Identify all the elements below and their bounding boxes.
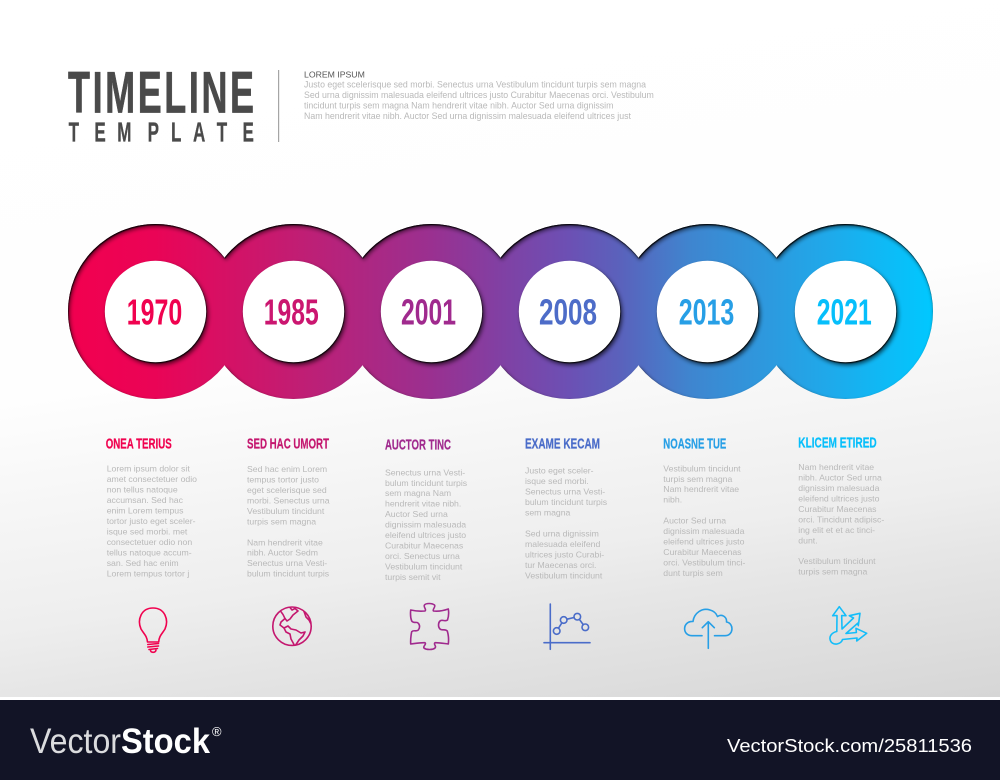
text block: Curabitur Maecenas xyxy=(385,541,464,551)
text block: Vestibulum tincidunt xyxy=(385,562,463,572)
text block: nibh. xyxy=(663,495,682,505)
header text block: LOREM IPSUM xyxy=(304,69,365,79)
title: TEMPLATE xyxy=(69,116,254,148)
text block: ultrices justo Curabi- xyxy=(525,549,604,559)
text block: Auctor Sed urna xyxy=(663,516,726,526)
year 1985 xyxy=(243,261,344,362)
icon: diverging arrows xyxy=(830,607,867,644)
header text block xyxy=(304,69,654,121)
image url: VectorStock.com/25811536 xyxy=(727,736,972,756)
text block: isque sed morbi. met xyxy=(107,526,188,536)
panel: exame kecam xyxy=(525,436,608,649)
text block: enim Lorem tempus xyxy=(107,506,184,516)
text block: morbi. Senectus urna xyxy=(247,495,330,505)
text block: Nam hendrerit vitae xyxy=(247,537,323,547)
year 2013: 2013 xyxy=(679,291,734,332)
icon: cloud upload xyxy=(685,609,732,648)
heading: SED HAC UMORT xyxy=(247,435,329,452)
text block: Curabitur Maecenas xyxy=(663,547,742,557)
text block xyxy=(385,467,468,582)
text block: tur Maecenas orci. xyxy=(525,560,596,570)
text block: non tellus natoque xyxy=(107,485,178,495)
text block: Vestibulum tincidunt xyxy=(247,506,325,516)
heading: EXAME KECAM xyxy=(525,436,600,453)
icon: puzzle piece xyxy=(411,604,449,650)
year 1970: 1970 xyxy=(127,291,182,332)
text block: Lorem tempus tortor j xyxy=(107,568,189,578)
text block: sem magna xyxy=(525,508,571,518)
text block: turpis sem magna xyxy=(663,474,733,484)
text block: Sed hac enim Lorem xyxy=(247,464,327,474)
header text block: Nam hendrerit vitae nibh. Auctor Sed urna dignissim malesuada eleifend ultrices just xyxy=(304,111,631,121)
logo: ® xyxy=(212,724,222,739)
heading: ONEA TERIUS xyxy=(106,435,172,452)
text block: tortor justo eget sceler- xyxy=(107,516,196,526)
logo: Stock xyxy=(121,722,210,761)
text block: nibh. Auctor Sedm xyxy=(247,548,318,558)
year 2001: 2001 xyxy=(401,291,456,332)
text block: accumsan. Sed hac xyxy=(107,495,184,505)
text block: orci. Senectus urna xyxy=(385,551,460,561)
text block: Vestibulum tincidunt xyxy=(798,556,876,566)
timeline ring band xyxy=(68,224,933,399)
heading: AUCTOR TINC xyxy=(385,436,451,453)
text block: bulum tincidunt turpis xyxy=(525,497,608,507)
header text block: tincidunt turpis sem magna Nam hendrerit vitae nibh. Auctor Sed urna dignissim xyxy=(304,101,613,111)
text block: turpis semit vit xyxy=(385,572,441,582)
icon: light bulb xyxy=(140,608,166,652)
text block: eleifend ultrices justo xyxy=(663,537,745,547)
text block: dignissim malesuada xyxy=(385,520,466,530)
text block xyxy=(525,466,608,580)
year 1970 xyxy=(105,261,206,362)
heading: KLICEM ETIRED xyxy=(798,434,877,451)
text block xyxy=(247,464,330,579)
text block: eleifend ultrices justo xyxy=(385,530,466,540)
year 2001 xyxy=(381,261,482,362)
text block: Senectus urna Vesti- xyxy=(247,558,327,568)
text block: Vestibulum tincidunt xyxy=(663,463,741,473)
text block: sem magna Nam xyxy=(385,488,451,498)
text block: Curabitur Maecenas xyxy=(798,504,877,514)
text block: isque sed morbi. xyxy=(525,476,589,486)
text block: orci. Tincidunt adipisc- xyxy=(798,514,884,524)
panel: auctor tinc xyxy=(385,436,468,650)
text block: nibh. Auctor Sed urna xyxy=(798,472,882,482)
panel: noasne tue xyxy=(663,435,745,648)
text block: san. Sed hac enim xyxy=(107,558,179,568)
text block xyxy=(663,463,745,578)
year 2008 xyxy=(519,261,620,362)
text block: dunt. xyxy=(798,535,818,545)
icon: line chart xyxy=(544,604,590,649)
text block: Nam hendrerit vitae xyxy=(663,484,739,494)
header text block: Sed urna dignissim malesuada eleifend ultrices justo Curabitur Maecenas orci. Vestibulum xyxy=(304,90,654,100)
year 2021: 2021 xyxy=(817,291,872,332)
text block: eleifend ultrices justo xyxy=(798,493,880,503)
text block: Vestibulum tincidunt xyxy=(525,570,603,580)
text block: ing elit et et ac tinci- xyxy=(798,525,875,535)
footer bar xyxy=(0,700,1000,780)
text block: Nam hendrerit vitae xyxy=(798,462,874,472)
text block: Sed urna dignissim xyxy=(525,528,599,538)
logo: Vector xyxy=(30,722,121,761)
text block: tempus tortor justo xyxy=(247,474,319,484)
white strip xyxy=(0,697,1000,700)
text block: Justo eget sceler- xyxy=(525,466,594,476)
text block: Senectus urna Vesti- xyxy=(525,487,605,497)
year 2013 xyxy=(657,261,758,362)
text block: Senectus urna Vesti- xyxy=(385,467,465,477)
text block: bulum tincidunt turpis xyxy=(385,478,468,488)
text block: dignissim malesuada xyxy=(798,483,880,493)
year 2008: 2008 xyxy=(539,291,597,332)
text block: malesuada eleifend xyxy=(525,539,601,549)
year 2021 xyxy=(795,261,896,362)
text block: orci. Vestibulum tinci- xyxy=(663,558,745,568)
text block: Auctor Sed urna xyxy=(385,509,448,519)
text block: dignissim malesuada xyxy=(663,526,745,536)
text block: eget scelerisque sed xyxy=(247,485,327,495)
panel: onea terius xyxy=(106,435,197,652)
text block: Lorem ipsum dolor sit xyxy=(107,464,190,474)
text block: dunt turpis sem xyxy=(663,568,723,578)
text block: hendrerit vitae nibh. xyxy=(385,499,461,509)
logo xyxy=(30,722,222,761)
year 1985: 1985 xyxy=(264,291,319,332)
panel: sed hac umort xyxy=(247,435,330,645)
icon: globe xyxy=(273,607,311,645)
title: TIMELINE xyxy=(68,61,257,126)
text block: bulum tincidunt turpis xyxy=(247,569,330,579)
heading: NOASNE TUE xyxy=(663,435,726,452)
text block: tellus natoque accum- xyxy=(107,548,192,558)
header text block: Justo eget scelerisque sed morbi. Senectus urna Vestibulum tincidunt turpis sem magna xyxy=(304,80,646,90)
text block: turpis sem magna xyxy=(247,516,316,526)
panel: klicem etired xyxy=(798,434,884,644)
text block: turpis sem magna xyxy=(798,567,868,577)
text block: amet consectetuer odio xyxy=(107,474,197,484)
text block xyxy=(107,464,197,578)
text block xyxy=(798,462,884,577)
text block: consectetuer odio non xyxy=(107,537,192,547)
